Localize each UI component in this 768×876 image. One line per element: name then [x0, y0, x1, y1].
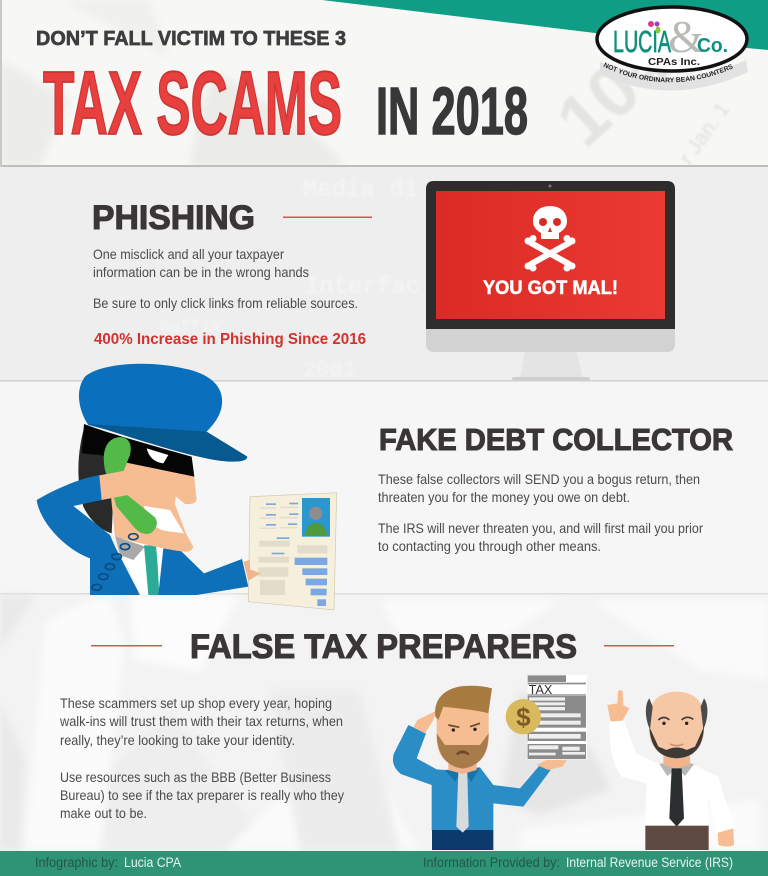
shirt — [393, 725, 551, 831]
icon: dollar coin — [506, 699, 541, 734]
panel: header banner: r Jan. 1 — [675, 98, 734, 169]
hat — [79, 364, 222, 437]
collar — [659, 761, 694, 776]
heading: In 2018: IN 2018 — [376, 74, 528, 149]
shirt and arms — [609, 720, 734, 833]
collector body copy: These false collectors will SEND you a bogus return, then — [378, 471, 700, 487]
hair — [78, 425, 115, 533]
footer: information source — [423, 855, 733, 870]
neck and head — [448, 753, 477, 774]
logo: Lucia & Co. CPAs Inc.: & — [668, 11, 704, 62]
heading: Tax Scams: TAX SCAMS — [43, 54, 342, 154]
desk — [645, 826, 709, 850]
preparers body copy: make out to be. — [60, 805, 147, 821]
panel: header banner: 104 — [542, 22, 685, 162]
section: false tax preparers text — [59, 628, 674, 821]
footer: infographic credit — [35, 855, 181, 870]
preparers body copy: These scammers set up shop every year, hoping — [60, 695, 332, 711]
footer: information source: Internal Revenue Service (IRS) — [566, 855, 733, 870]
heading: Don't fall victim: DON’T FALL VICTIM TO THESE 3 — [36, 27, 346, 50]
illustration: masked scammer on phone — [37, 364, 337, 610]
phishing body copy — [93, 246, 358, 311]
logo: Lucia & Co. CPAs Inc.: NOT YOUR ORDINARY BEAN COUNTERS — [604, 62, 733, 82]
icon: dollar coin: $ — [516, 702, 531, 732]
tax form — [528, 675, 587, 759]
logo: Lucia & Co. CPAs Inc.: CPAs Inc. — [648, 56, 700, 68]
phishing body copy: One misclick and all your taxpayer — [93, 246, 284, 262]
logo: Lucia & Co. CPAs Inc.: Co. — [697, 35, 728, 57]
phone cord — [92, 534, 138, 590]
tax form: TAX — [529, 683, 553, 697]
panel: phishing background: Suffix — [160, 318, 221, 337]
section: fake debt collector text — [378, 422, 733, 554]
jacket — [37, 475, 140, 595]
preparers body copy: really, they’re looking to take your identity. — [60, 732, 295, 748]
panel: false tax preparers background — [0, 595, 768, 851]
logo: Lucia & Co. CPAs Inc.: LUCIA — [613, 24, 671, 59]
panel: phishing background — [0, 167, 768, 383]
raised hand — [607, 690, 629, 722]
footer: infographic credit: Lucia CPA — [124, 855, 181, 870]
collector body copy: The IRS will never threaten you, and will first mail you prior — [378, 520, 703, 536]
teal corner band — [322, 0, 768, 50]
face — [110, 460, 197, 552]
head — [663, 747, 690, 768]
heading: False tax preparers: FALSE TAX PREPARERS — [190, 628, 577, 666]
illustration: confused man with tax form — [393, 675, 587, 850]
screen caption: YOU GOT MAL! — [483, 277, 618, 299]
document — [248, 493, 337, 610]
phishing divider — [283, 216, 372, 218]
panel: phishing background: Media di — [303, 177, 418, 204]
illustration: bald bearded man — [607, 690, 734, 850]
footer: information source: Information Provided by: — [423, 855, 560, 870]
panel: phishing background: 2001 — [303, 358, 356, 383]
phishing body copy: information can be in the wrong hands — [93, 264, 309, 280]
icon: skull and crossbones — [524, 206, 576, 272]
section: phishing text — [92, 199, 372, 348]
hands — [413, 711, 437, 733]
hand — [99, 471, 128, 500]
preparers body copy: Use resources such as the BBB (Better Business — [60, 769, 331, 785]
preparers body copy: walk-ins will trust them with their tax returns, when — [59, 713, 343, 729]
collector body copy — [378, 471, 703, 554]
heading: Phishing: PHISHING — [92, 199, 255, 237]
panel: phishing background: Interfac — [305, 274, 420, 301]
panel: fake debt collector background — [0, 382, 768, 594]
right divider — [604, 645, 674, 646]
smile — [144, 506, 184, 533]
left divider — [91, 645, 162, 646]
collector body copy: threaten you for the money you owe on debt. — [378, 489, 630, 505]
phone — [104, 437, 157, 534]
heading: Fake debt collector: FAKE DEBT COLLECTOR — [379, 422, 733, 457]
footer bar — [0, 851, 768, 876]
phishing statistic: 400% Increase in Phishing Since 2016 — [94, 331, 366, 348]
illustration: computer monitor — [426, 181, 675, 381]
tie — [669, 768, 684, 827]
logo: Lucia & Co. CPAs Inc. — [595, 5, 749, 90]
panel: header banner — [0, 0, 768, 169]
mask — [82, 424, 194, 477]
phishing body copy: Be sure to only click links from reliable sources. — [93, 295, 358, 311]
footer: infographic credit: Infographic by: — [35, 855, 118, 870]
preparers body copy: Bureau) to see if the tax preparer is really who they — [60, 787, 344, 803]
collector body copy: to contacting you through other means. — [378, 538, 601, 554]
preparers body copy — [59, 695, 344, 821]
